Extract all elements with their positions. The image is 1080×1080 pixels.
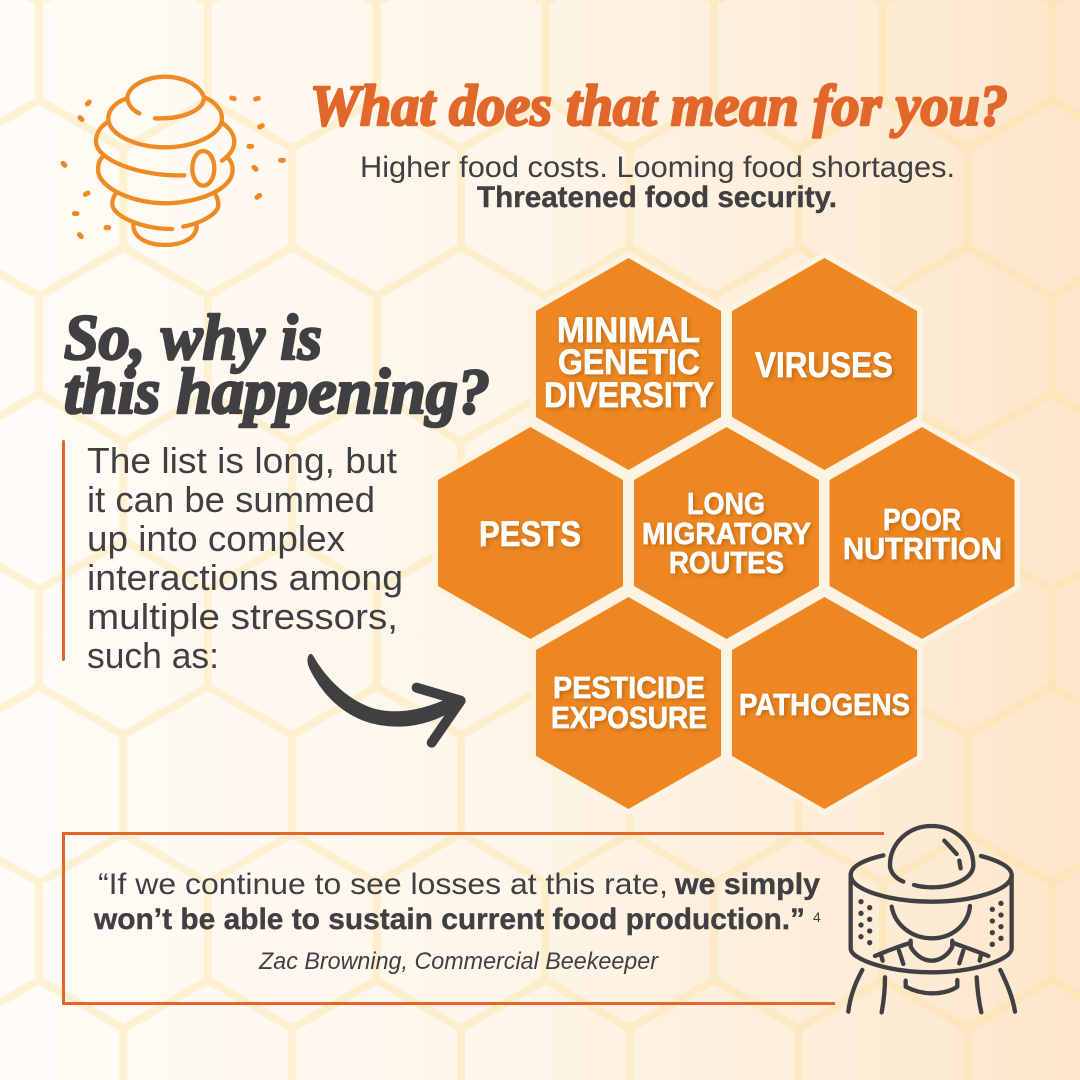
hexagon cluster	[438, 258, 1014, 809]
icon: beehive	[63, 77, 283, 245]
intro paragraph: The list is long, but	[87, 440, 397, 481]
hex: viruses	[732, 258, 917, 470]
quote text: we simply	[674, 868, 820, 901]
hex: long migratory routes: LONG	[687, 486, 765, 521]
quote text	[93, 868, 821, 936]
quote attribution: Zac Browning, Commercial Beekeeper	[258, 948, 659, 975]
intro paragraph: multiple stressors,	[87, 596, 398, 637]
heading: so, why is this happening	[64, 302, 490, 428]
heading: so, why is this happening: this happening?	[64, 356, 490, 428]
hex: minimal genetic diversity: MINIMAL	[557, 311, 700, 350]
orange side rule	[62, 440, 65, 661]
intro paragraph: interactions among	[87, 557, 403, 598]
quote text: 4	[813, 909, 821, 925]
title: What does that mean for you?	[310, 73, 1008, 138]
hex: long migratory routes	[634, 427, 819, 639]
hex: viruses: VIRUSES	[755, 346, 893, 385]
hex: minimal genetic diversity: DIVERSITY	[544, 376, 714, 415]
hex: pesticide exposure: PESTICIDE	[553, 670, 705, 705]
intro paragraph: up into complex	[87, 518, 345, 559]
quote frame	[64, 834, 884, 1004]
quote text: won’t be able to sustain current food production.”	[93, 903, 805, 936]
hex: pathogens: PATHOGENS	[739, 687, 910, 722]
hex: pesticide exposure	[536, 597, 721, 809]
hex: pests: PESTS	[479, 515, 581, 554]
hex: long migratory routes: ROUTES	[669, 545, 784, 580]
subtitle text: Higher food costs. Looming food shortages.	[360, 151, 955, 184]
hex: pests	[438, 427, 623, 639]
hex: poor nutrition: NUTRITION	[843, 531, 1002, 566]
arrow	[307, 654, 461, 743]
hex: poor nutrition: POOR	[883, 502, 961, 537]
subtitle text	[360, 151, 955, 214]
hex: pathogens	[732, 597, 917, 809]
hex: minimal genetic diversity: GENETIC	[558, 343, 700, 382]
quote text: “If we continue to see losses at this rate,	[98, 868, 668, 901]
heading: so, why is this happening: So, why is	[64, 302, 322, 374]
intro paragraph: it can be summed	[87, 479, 375, 520]
icon: beekeeper	[848, 826, 1015, 1012]
hex: pesticide exposure: EXPOSURE	[551, 700, 707, 735]
intro paragraph: such as:	[87, 635, 219, 676]
hex: minimal genetic diversity	[536, 258, 721, 470]
intro paragraph	[87, 440, 403, 676]
subtitle text: Threatened food security.	[477, 181, 837, 214]
hex: long migratory routes: MIGRATORY	[642, 516, 811, 551]
hex: poor nutrition	[830, 427, 1014, 639]
